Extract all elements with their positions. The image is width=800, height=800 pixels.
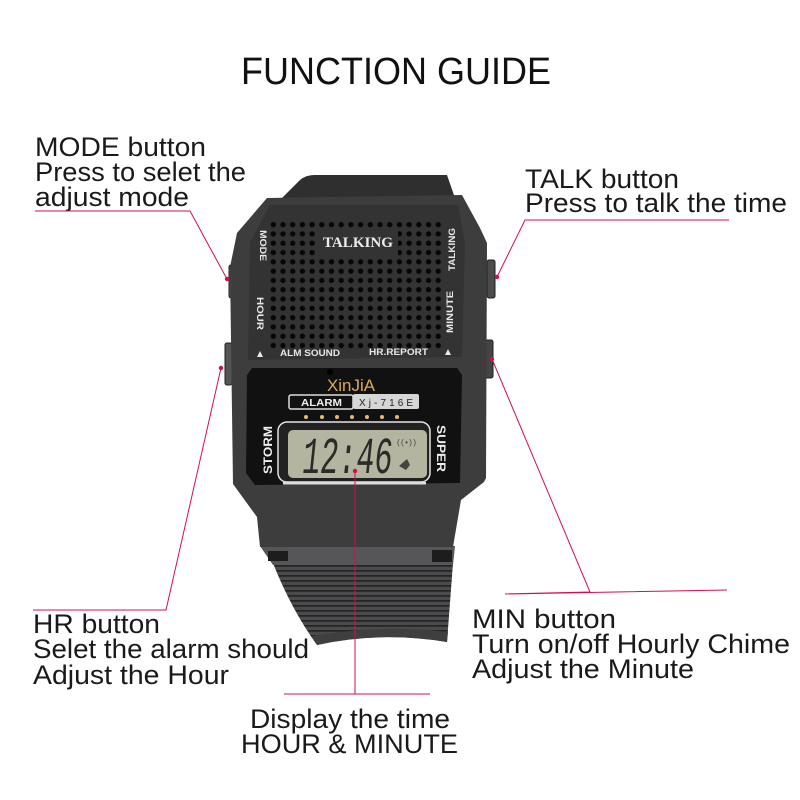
callout: MODE button xyxy=(35,132,246,281)
callout: HR button: Selet the alarm should xyxy=(33,634,309,664)
callout: MIN button xyxy=(472,357,790,684)
LCD time: 12:46 xyxy=(299,430,396,489)
side labels: STORM xyxy=(261,426,275,474)
model badge xyxy=(289,394,419,409)
callout: MIN button: Adjust the Minute xyxy=(472,654,694,684)
button labels xyxy=(255,228,457,358)
alarm icons: ((•)) xyxy=(397,438,416,447)
callout: display xyxy=(241,469,458,759)
title: FUNCTION GUIDE xyxy=(241,51,551,93)
button labels: HOUR xyxy=(255,297,265,331)
callout: MODE button: adjust mode xyxy=(35,182,189,212)
indicator dots xyxy=(304,415,399,419)
callout: MODE button: MODE button xyxy=(35,132,206,162)
side buttons xyxy=(225,260,495,385)
callout: TALK button: Press to talk the time xyxy=(525,188,787,218)
watch illustration xyxy=(225,175,495,645)
lower strap xyxy=(260,546,455,645)
callout: HR button: HR button xyxy=(33,609,160,639)
callout: HR button: Adjust the Hour xyxy=(33,660,229,690)
model badge: ALARM xyxy=(301,398,342,409)
LCD screen xyxy=(278,422,430,489)
display panel xyxy=(246,368,462,489)
button labels: TALKING xyxy=(447,228,457,271)
callout: HR button xyxy=(33,366,309,690)
upper strap xyxy=(282,175,455,198)
label: TALKING: TALKING xyxy=(323,235,393,251)
button labels: MINUTE xyxy=(445,291,455,333)
brand logo: XinJiA xyxy=(327,376,376,395)
label: TALKING xyxy=(316,230,398,256)
callout: MIN button: MIN button xyxy=(472,604,616,634)
callout: TALK button xyxy=(495,164,787,279)
callout: MODE button: Press to selet the xyxy=(35,157,246,187)
callout: display: Display the time xyxy=(250,704,450,734)
display panel: SUPER xyxy=(434,425,448,472)
model badge: Xj-716E xyxy=(359,398,413,409)
button labels: ALM SOUND xyxy=(280,348,341,358)
alarm icons xyxy=(397,438,416,470)
speaker grille xyxy=(268,220,444,350)
callout: display: HOUR & MINUTE xyxy=(241,729,458,759)
callout: MIN button: Turn on/off Hourly Chime xyxy=(472,629,790,659)
button labels: MODE xyxy=(258,230,268,261)
watch case xyxy=(230,195,487,547)
button labels: HR.REPORT xyxy=(369,347,429,357)
speaker panel xyxy=(248,205,465,360)
callout: TALK button: TALK button xyxy=(525,164,679,194)
